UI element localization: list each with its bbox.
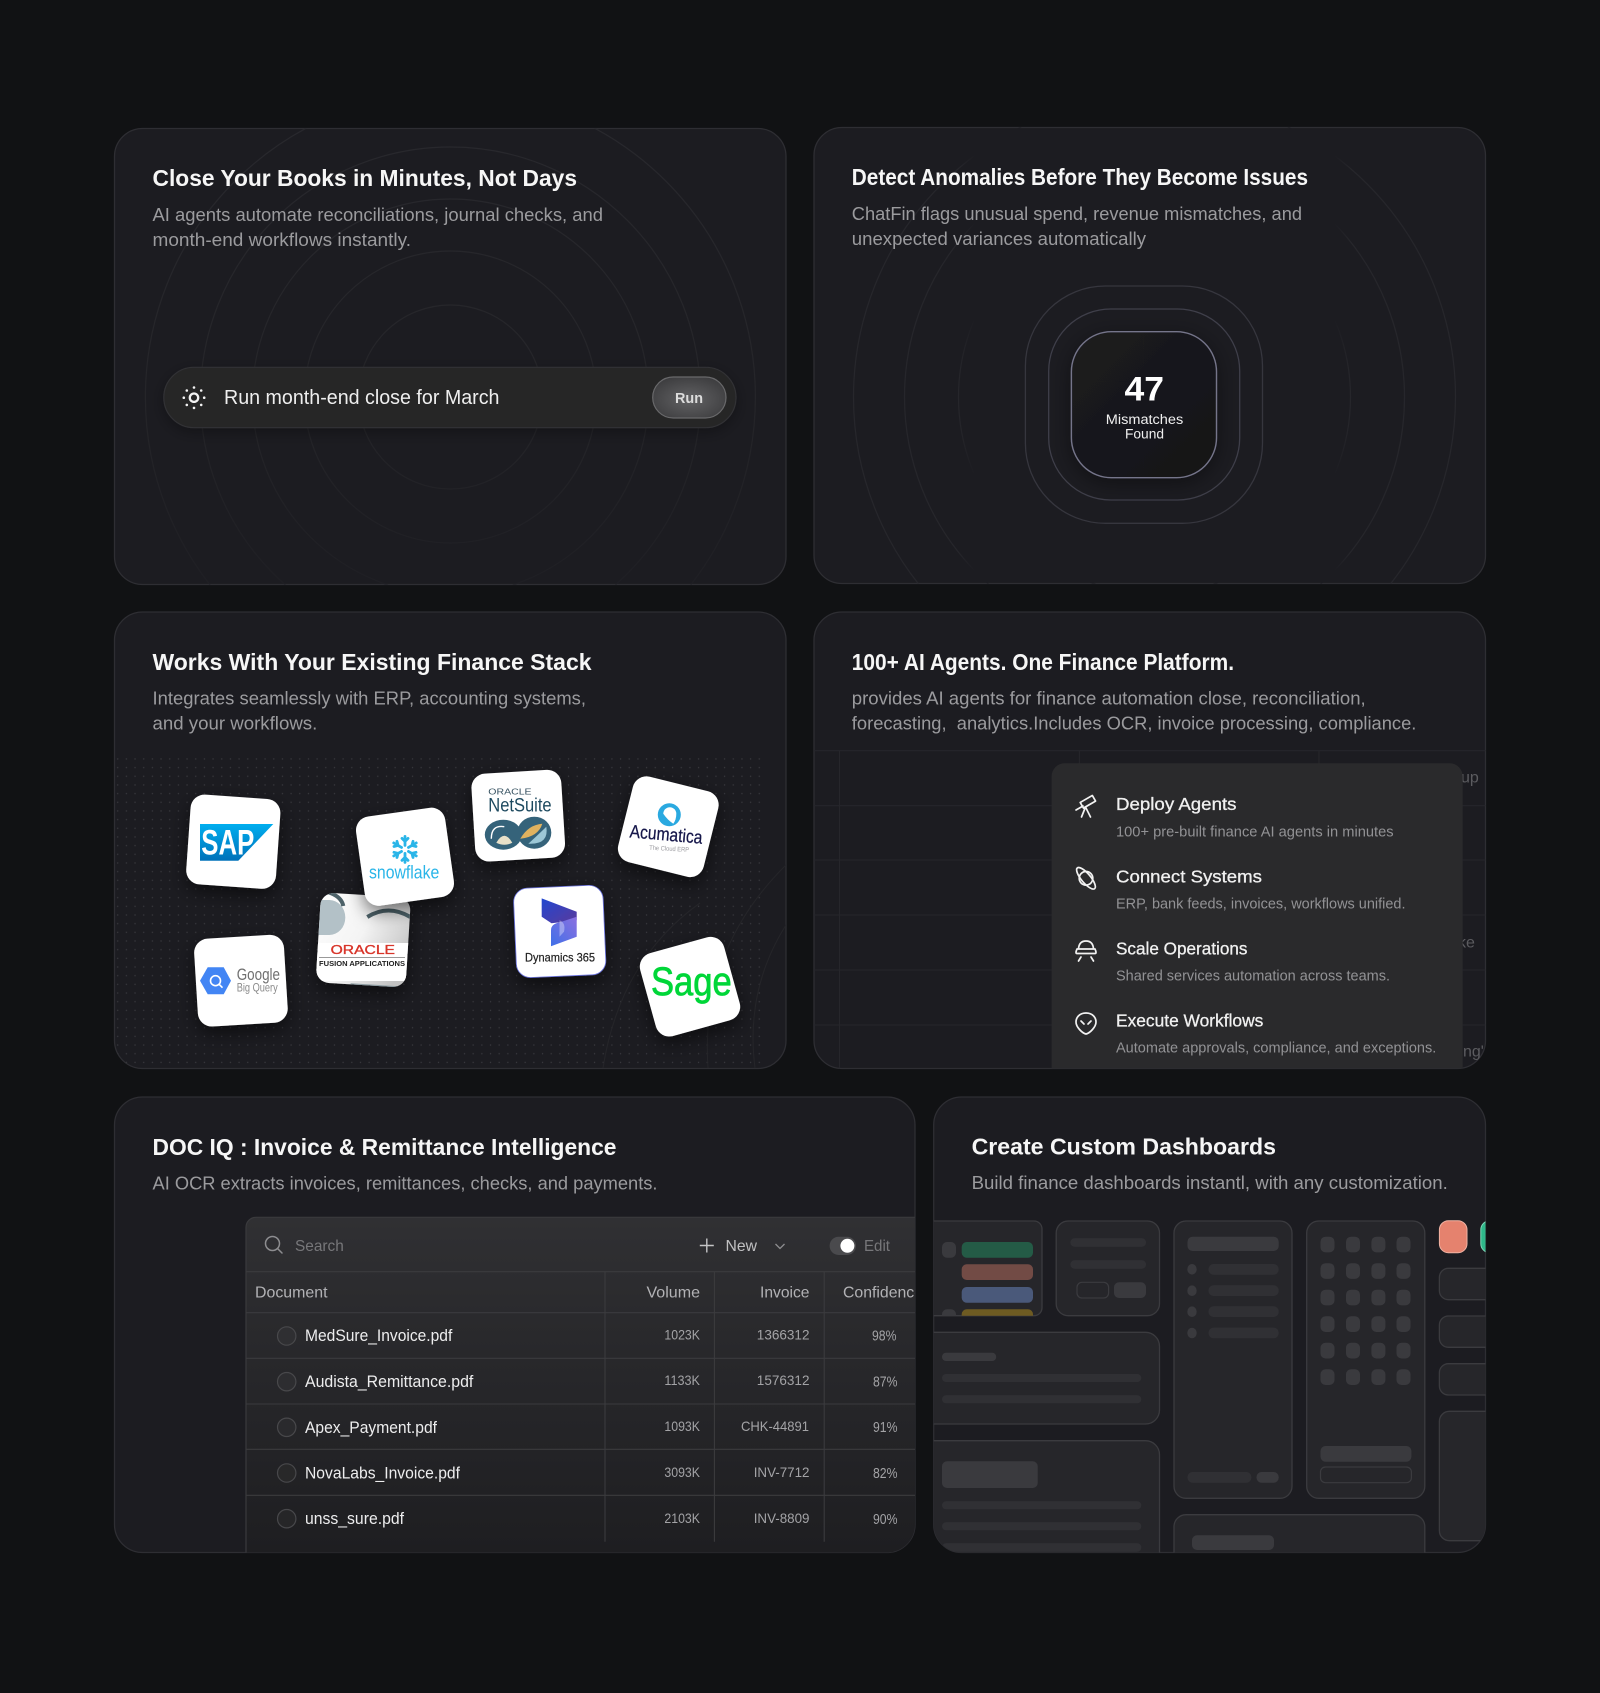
description <box>152 204 603 250</box>
swatch: green <box>1481 1221 1508 1253</box>
row: NovaLabs <box>278 1464 898 1482</box>
row: Audista <box>278 1372 898 1391</box>
table header: Invoice <box>760 1285 810 1302</box>
logo: Oracle NetSuite: ORACLE <box>488 787 532 797</box>
step: scale operations <box>1075 940 1389 980</box>
step: scale operations: Scale Operations <box>1116 938 1248 958</box>
logo: Snowflake: snowflake <box>369 861 439 882</box>
logo: SAP: SAP <box>201 824 254 863</box>
description: Integrates seamlessly with ERP, accounting systems, <box>152 687 586 708</box>
icon: sun <box>182 386 206 409</box>
table header: Confidence <box>843 1285 923 1302</box>
icon: telescope <box>1076 795 1096 817</box>
row: MedSure: 1366312 <box>757 1326 810 1342</box>
row: Audista: Audista_Remittance.pdf <box>305 1372 474 1391</box>
prompt text: Run month-end close for March <box>224 387 500 409</box>
description: forecasting, analytics.Includes OCR, invoice processing, compliance. <box>852 712 1416 733</box>
logo: Google BigQuery: Google <box>237 965 280 984</box>
logo: Oracle Fusion <box>313 890 413 995</box>
description: AI OCR extracts invoices, remittances, checks, and payments. <box>152 1172 658 1194</box>
table grid <box>246 1272 916 1542</box>
row: Audista: 1133K <box>664 1373 700 1388</box>
logo: Oracle NetSuite: NetSuite <box>488 796 552 817</box>
step: connect systems: Connect Systems <box>1116 866 1262 886</box>
row: Apex: 1093K <box>664 1419 700 1434</box>
invoice table <box>246 1216 915 1552</box>
count label: Mismatches <box>1106 412 1183 427</box>
description <box>852 203 1302 249</box>
icon: plus <box>700 1238 714 1252</box>
logo: SAP <box>185 794 281 890</box>
table header: Document <box>255 1285 328 1302</box>
widget: summary card <box>934 1440 1160 1552</box>
description <box>152 687 586 733</box>
logo: Snowflake <box>354 806 456 908</box>
logo: Google BigQuery: Big Query <box>237 981 278 995</box>
count label: Found <box>1125 426 1164 441</box>
step: deploy agents <box>1076 794 1394 841</box>
widget: text card <box>934 1332 1160 1424</box>
description: unexpected variances automatically <box>852 228 1147 249</box>
heading: 100+ AI Agents. One Finance Platform. <box>852 649 1234 675</box>
heading: Close Your Books in Minutes, Not Days <box>152 165 577 191</box>
step: connect systems <box>1074 865 1406 913</box>
logo: Acumatica: Acumatica <box>629 820 704 848</box>
step: execute workflows: Execute Workflows <box>1116 1011 1264 1031</box>
row: NovaLabs: 3093K <box>664 1465 700 1480</box>
run button <box>653 377 726 418</box>
row: Apex: CHK-44891 <box>741 1418 809 1434</box>
agent steps panel <box>1052 764 1463 1068</box>
step: deploy agents: 100+ pre-built finance AI agents in minutes <box>1116 825 1394 841</box>
description: month-end workflows instantly. <box>152 229 411 250</box>
row: unss_sure: 2103K <box>664 1511 700 1526</box>
row: NovaLabs: 82% <box>873 1466 898 1482</box>
widget: keypad column <box>1307 1221 1425 1498</box>
step: execute workflows <box>1076 1011 1436 1057</box>
row: MedSure: MedSure_Invoice.pdf <box>305 1326 453 1345</box>
logo: Acumatica: The Cloud ERP <box>649 845 689 854</box>
icon: ufo <box>1076 941 1096 961</box>
row: Apex: Apex_Payment.pdf <box>305 1418 437 1437</box>
dot grid <box>116 756 786 1069</box>
toolbar: Search <box>295 1238 344 1255</box>
row: NovaLabs: INV-7712 <box>754 1464 810 1480</box>
logo: Dynamics 365 <box>513 885 606 978</box>
logo: Oracle Fusion: FUSION APPLICATIONS <box>319 959 405 968</box>
widget: coloured bars <box>934 1220 1042 1316</box>
description: and your workflows. <box>152 712 317 733</box>
description <box>852 687 1416 733</box>
widget: list column <box>1174 1221 1292 1498</box>
widget: form card <box>1056 1221 1160 1316</box>
toggle <box>830 1237 856 1255</box>
run button: Run <box>675 390 703 407</box>
row: unss_sure: INV-8809 <box>754 1510 810 1526</box>
cropped row labels: ng' <box>1463 1044 1484 1061</box>
description: AI agents automate reconciliations, journal checks, and <box>152 204 603 225</box>
panel: doc iq <box>114 1097 946 1577</box>
logo: Oracle NetSuite <box>471 769 566 862</box>
panel: close your books <box>114 128 787 585</box>
cropped row labels <box>1462 774 1483 1060</box>
toolbar: New <box>726 1238 757 1255</box>
toolbar: Edit <box>864 1238 891 1255</box>
row: Audista: 1576312 <box>757 1372 810 1388</box>
count label <box>1106 412 1183 441</box>
logo: Google BigQuery <box>193 934 289 1027</box>
logo: Acumatica <box>615 773 722 880</box>
widget: bottom card <box>1174 1515 1425 1585</box>
logo: Sage: Sage <box>651 960 732 1004</box>
table header: Volume <box>646 1285 700 1302</box>
step: deploy agents: Deploy Agents <box>1116 794 1237 814</box>
row: MedSure: 1023K <box>664 1328 700 1342</box>
swatch: orange <box>1439 1221 1467 1253</box>
count: 47 <box>1124 371 1164 409</box>
side rings <box>853 128 1456 584</box>
panel: finance stack <box>114 612 786 1069</box>
prompt pill <box>164 367 736 428</box>
panel: custom dashboards <box>933 1096 1486 1553</box>
row: Apex <box>278 1418 898 1437</box>
description: provides AI agents for finance automation close, reconciliation, <box>852 687 1366 708</box>
cropped row labels: up <box>1461 770 1479 787</box>
table header <box>256 1286 915 1298</box>
heading: DOC IQ : Invoice & Remittance Intelligence <box>152 1134 616 1160</box>
row: MedSure: 98% <box>872 1329 897 1345</box>
row: unss_sure: 90% <box>873 1512 898 1528</box>
icon: search <box>266 1236 282 1253</box>
heading: Create Custom Dashboards <box>972 1134 1276 1160</box>
row: MedSure <box>278 1326 897 1345</box>
logo: Sage <box>637 934 743 1040</box>
icon: planet <box>1076 866 1096 890</box>
cropped row labels: ke <box>1458 934 1475 951</box>
step: connect systems: ERP, bank feeds, invoices, workflows unified. <box>1116 897 1406 913</box>
row: Apex: 91% <box>873 1420 898 1436</box>
grid background <box>815 750 1484 1068</box>
row: unss_sure <box>278 1509 898 1528</box>
dashboard skeleton widgets <box>934 1220 1486 1552</box>
panel: detect anomalies <box>814 127 1486 584</box>
heading: Detect Anomalies Before They Become Issues <box>852 164 1308 190</box>
logo: Oracle Fusion: ORACLE <box>331 942 395 957</box>
step: execute workflows: Automate approvals, compliance, and exceptions. <box>1116 1041 1436 1057</box>
heading: Works With Your Existing Finance Stack <box>152 649 592 675</box>
description: ChatFin flags unusual spend, revenue mismatches, and <box>852 203 1302 224</box>
icon: alien <box>1076 1013 1096 1034</box>
toolbar <box>266 1236 891 1255</box>
logo: Dynamics 365: Dynamics 365 <box>525 951 595 965</box>
icon: chevron <box>776 1244 784 1248</box>
mismatch counter <box>1025 286 1262 523</box>
row: Audista: 87% <box>873 1374 898 1390</box>
description: Build finance dashboards instantl, with any customization. <box>972 1172 1448 1193</box>
row: NovaLabs: NovaLabs_Invoice.pdf <box>305 1464 460 1482</box>
row: unss_sure: unss_sure.pdf <box>305 1509 404 1528</box>
concentric background rings <box>145 129 756 584</box>
widget: right stack <box>1439 1268 1519 1541</box>
step: scale operations: Shared services automation across teams. <box>1116 969 1390 985</box>
panel: AI agents <box>814 612 1486 1103</box>
